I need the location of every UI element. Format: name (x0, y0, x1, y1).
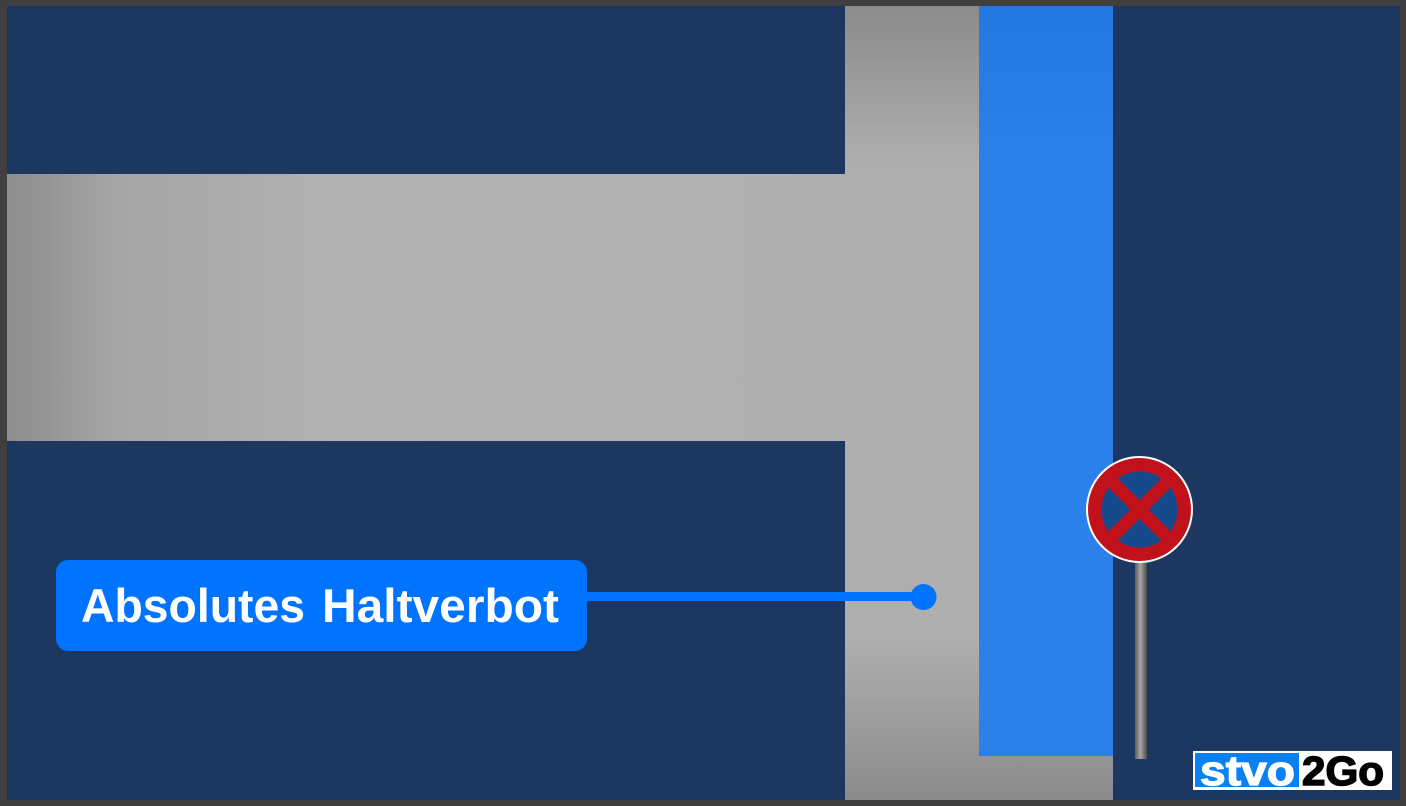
arrow: callout connector (585, 584, 936, 610)
callout: Absolutes Haltverbot: Haltverbot (322, 579, 559, 632)
panel: no-stopping zone (979, 6, 1113, 756)
panel: vertical road (845, 6, 1113, 800)
callout: Absolutes Haltverbot: Absolutes (81, 579, 305, 632)
icon: stvo2Go logo: stvo (1200, 747, 1295, 794)
icon: stvo2Go logo (1193, 747, 1392, 794)
panel: horizontal road (7, 174, 862, 441)
icon: stvo2Go logo: 2Go (1302, 748, 1384, 794)
icon: no-stopping sign (1086, 456, 1193, 563)
callout: Absolutes Haltverbot (56, 560, 587, 651)
icon: sign pole (1135, 560, 1147, 759)
